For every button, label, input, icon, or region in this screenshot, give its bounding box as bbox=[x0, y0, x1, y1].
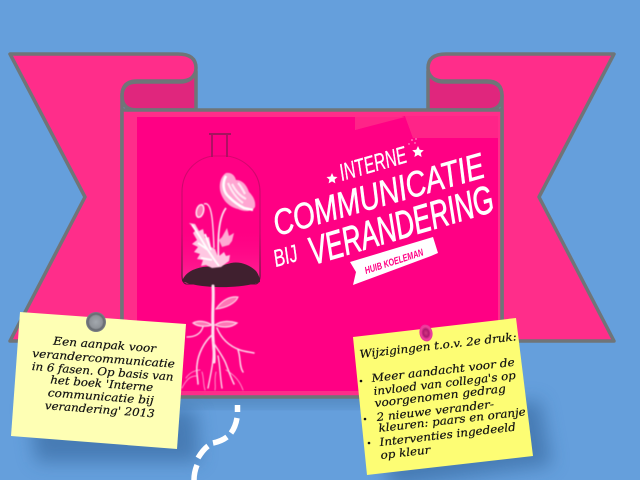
note text right: invloed van collega's op bbox=[373, 369, 516, 398]
note text left: verandercommunicatie bbox=[32, 347, 176, 371]
star left bbox=[326, 173, 338, 183]
note text left: in 6 fasen. Op basis van bbox=[31, 360, 174, 384]
note text left: communicatie bij bbox=[47, 386, 155, 407]
sticky note left bbox=[11, 312, 186, 449]
book cover bbox=[137, 116, 499, 391]
bud bbox=[195, 204, 205, 218]
note text right bbox=[359, 330, 527, 462]
title bbox=[268, 142, 499, 274]
note text right: Wijzigingen t.o.v. 2e druk: bbox=[359, 330, 517, 361]
note text right: kleuren: paars en oranje bbox=[378, 405, 527, 435]
banner centre panel bbox=[122, 110, 502, 397]
leaves bbox=[189, 223, 230, 268]
bottle neck bbox=[209, 134, 231, 157]
banner left fold bbox=[122, 71, 196, 110]
note text right: voorgenomen gedrag bbox=[374, 382, 506, 410]
soil bbox=[182, 262, 260, 287]
dashed path bbox=[194, 405, 238, 480]
sparkles bbox=[408, 138, 417, 145]
note text left: verandering' 2013 bbox=[44, 399, 155, 420]
note shadow right bbox=[380, 400, 552, 480]
banner left tail bbox=[10, 54, 196, 341]
cover background bbox=[137, 116, 498, 391]
illustration: poppy in bell jar bbox=[182, 134, 260, 287]
note text right: Interventies ingedeeld bbox=[378, 421, 516, 449]
title line: verandering: VERANDERING bbox=[303, 178, 499, 274]
stems bbox=[218, 208, 226, 266]
pin pink bbox=[418, 323, 434, 343]
note shadow left bbox=[28, 400, 200, 462]
illustration: roots bbox=[182, 286, 254, 390]
title line: communicatie: COMMUNICATIE bbox=[268, 145, 490, 244]
star right bbox=[412, 146, 424, 157]
cover patch bbox=[355, 116, 498, 138]
banner bbox=[10, 54, 614, 397]
author ribbon bbox=[350, 237, 438, 285]
title line: interne: INTERNE bbox=[336, 142, 411, 187]
note text right: 2 nieuwe verander- bbox=[375, 398, 495, 424]
pin grey bbox=[86, 312, 106, 332]
title line: bij: BIJ bbox=[270, 240, 301, 273]
note text right: Meer aandacht voor de bbox=[370, 356, 516, 385]
shadow under banner bbox=[124, 392, 500, 406]
author name: HUIB KOELEMAN bbox=[364, 247, 425, 277]
bell jar glass bbox=[182, 156, 260, 284]
note text left: Een aanpak voor bbox=[52, 334, 157, 355]
bullets bbox=[360, 380, 370, 444]
banner right fold bbox=[428, 71, 502, 110]
banner right tail bbox=[428, 54, 614, 341]
note text left bbox=[28, 333, 177, 422]
poppy flower bbox=[189, 173, 255, 268]
note text left: het boek 'Interne bbox=[50, 373, 154, 394]
sticky note right bbox=[353, 318, 533, 475]
note text right: op kleur bbox=[380, 443, 432, 462]
